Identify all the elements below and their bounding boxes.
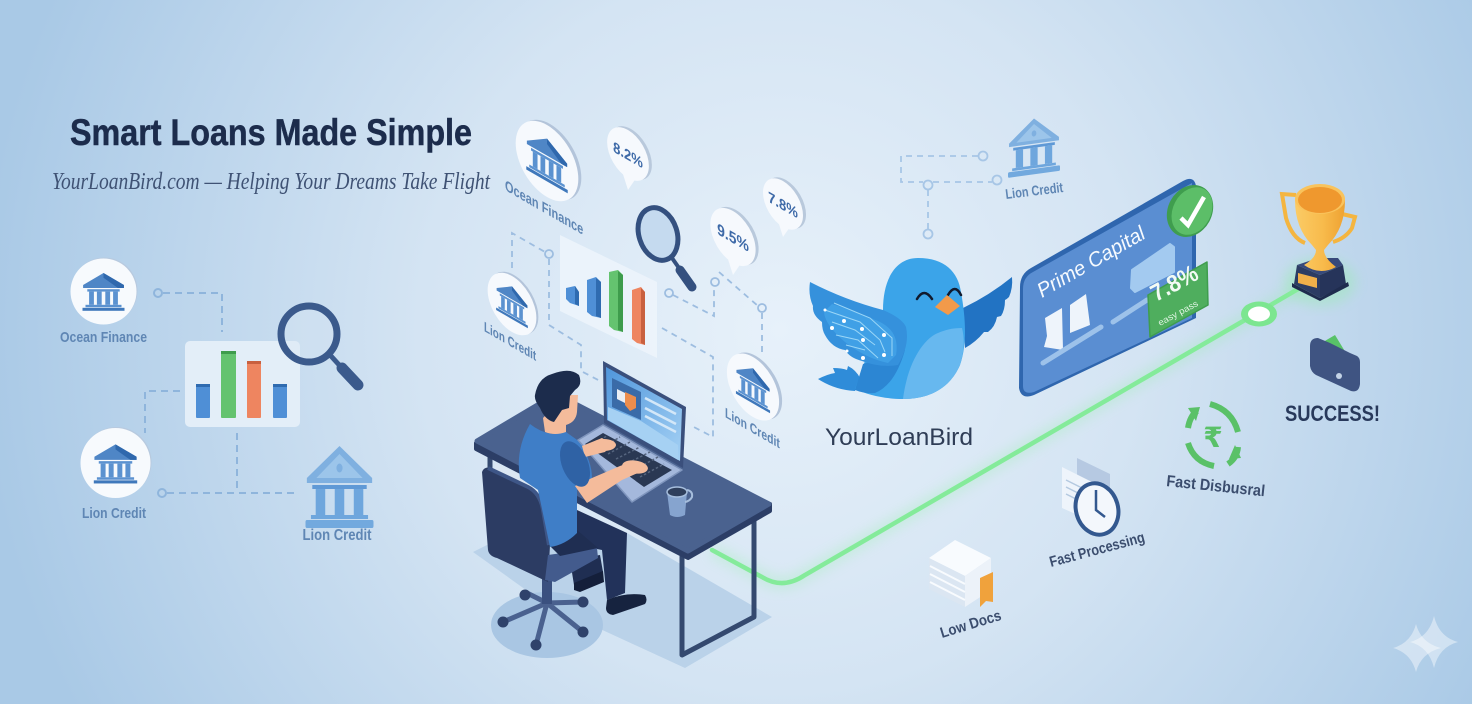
- bank: Lion Credit top: [1004, 115, 1064, 202]
- card: Prime Capital: [1019, 177, 1222, 396]
- eyes: [917, 289, 961, 299]
- bar chart isometric: [560, 235, 657, 358]
- disk: Lion Credit left: [484, 261, 538, 364]
- chair back: [482, 468, 550, 582]
- icon: sparkle: [1393, 616, 1458, 672]
- bubble: 8.2%: 8.2%: [613, 138, 643, 173]
- disk: Lion Credit right: [725, 341, 782, 452]
- pants and shoes: [570, 510, 646, 615]
- label: fast disbursal: Fast Disbusral: [1166, 473, 1266, 500]
- icon: magnifier isometric: [632, 202, 692, 287]
- bubble: 8.2%: [607, 117, 652, 202]
- bank: Lion Credit top: Lion Credit: [1004, 179, 1064, 202]
- chair shadow: [491, 592, 603, 658]
- bank: Ocean Finance: Ocean Finance: [60, 329, 147, 346]
- connector lines middle: [512, 233, 766, 437]
- bank: Ocean Finance: [60, 258, 147, 346]
- sleeve: [554, 437, 596, 491]
- body: [855, 258, 965, 399]
- shirt: [519, 424, 592, 547]
- card houses: [1044, 294, 1090, 350]
- wing shadow: [855, 350, 905, 393]
- subtitle: YourLoanBird.com — Helping Your Dreams Take Flight: [52, 169, 491, 195]
- card bars: [1043, 300, 1147, 363]
- belly: [903, 328, 964, 399]
- connector lines left: [145, 289, 296, 497]
- path node: [1241, 302, 1277, 326]
- icon: magnifier left: [281, 306, 358, 385]
- laptop screen: [603, 361, 686, 468]
- arms and hands: [575, 438, 649, 503]
- desk top: [476, 394, 770, 558]
- thigh: [550, 530, 598, 556]
- brand name: YourLoanBird: [825, 424, 973, 451]
- desk legs: [490, 452, 754, 655]
- beak: [935, 295, 960, 315]
- label: fast processing: Fast Processing: [1048, 529, 1147, 571]
- bird logo: [809, 258, 1012, 399]
- label: success: SUCCESS!: [1285, 401, 1380, 426]
- icon: wallet: [1310, 335, 1360, 391]
- disk: Ocean Finance: [505, 106, 583, 239]
- green path glow: [712, 282, 1310, 583]
- bank: Lion Credit large: Lion Credit: [302, 527, 372, 544]
- left wing: [809, 282, 907, 366]
- label: low docs: Low Docs: [938, 607, 1003, 642]
- disk: Ocean Finance: Ocean Finance: [505, 177, 583, 239]
- cup body: [1295, 200, 1345, 271]
- card text: Prime Capital: [1033, 221, 1151, 302]
- bubble: 9.5%: 9.5%: [717, 220, 749, 256]
- title: Smart Loans Made Simple: [70, 112, 472, 153]
- icon: rupee disbursal: ₹: [1203, 421, 1223, 454]
- check badge: [1158, 177, 1222, 245]
- hair: [535, 371, 580, 422]
- disk: Lion Credit right: Lion Credit: [725, 404, 780, 452]
- handles: [1282, 194, 1355, 243]
- green success path: [712, 282, 1310, 583]
- bubble: 7.8%: 7.8%: [768, 188, 798, 223]
- bar chart left: [185, 341, 300, 427]
- bank: Lion Credit large: [302, 446, 374, 544]
- panel: lender comparison left: [60, 258, 374, 544]
- coffee mug: [667, 487, 692, 517]
- chair base: [498, 578, 588, 650]
- bubble: 9.5%: [710, 197, 759, 288]
- base: [1297, 258, 1343, 275]
- bank: Lion Credit small: Lion Credit: [82, 505, 146, 522]
- right wing: [963, 277, 1012, 348]
- neck and face: [543, 395, 578, 434]
- laptop base: [578, 425, 682, 502]
- floor shadow: [473, 533, 772, 668]
- rate tag: 7.8%: [1146, 260, 1203, 307]
- tail: [818, 366, 860, 391]
- bank: Lion Credit small: [80, 427, 152, 522]
- icon: document stack: [929, 540, 993, 607]
- connector lines top: [901, 152, 1002, 238]
- illustration: person at desk: [476, 361, 770, 655]
- chair frame: [488, 468, 549, 545]
- chair seat: [545, 548, 598, 582]
- rate tag: [1146, 260, 1208, 337]
- icon: clock document: [1062, 458, 1124, 540]
- icon: rupee disbursal: [1188, 404, 1241, 466]
- disk: Lion Credit left: Lion Credit: [484, 318, 536, 364]
- panel: isometric floating lenders: [484, 106, 806, 452]
- desk crossbar: [495, 463, 525, 485]
- rate tag: easy pass: [1156, 298, 1200, 328]
- icon: trophy: [1282, 184, 1356, 306]
- bubble: 7.8%: [763, 168, 806, 248]
